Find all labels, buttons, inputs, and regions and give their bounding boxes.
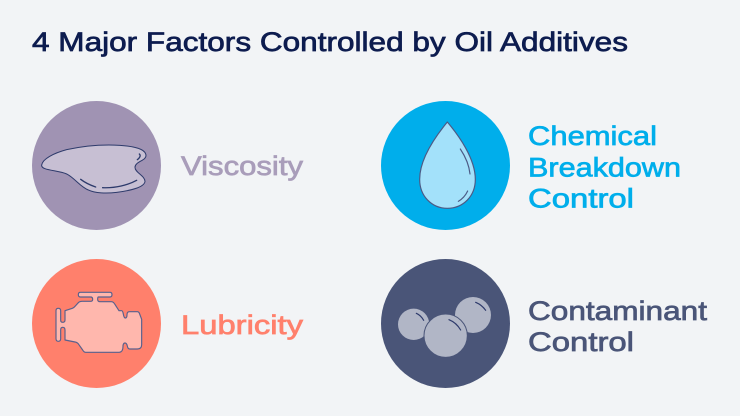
icon: water drop [420,122,475,208]
label: viscosity: Viscosity [181,151,304,181]
label: chemical breakdown control: Control [528,184,634,214]
panel: chemical breakdown control [381,101,681,230]
label: contaminant control: Control [528,327,634,357]
icon: oil puddle [42,145,146,193]
label: chemical breakdown control: Breakdown [528,152,681,182]
contaminant circle [381,259,510,388]
panel: lubricity [32,259,304,388]
title: 4 Major Factors Controlled by Oil Additives [32,27,628,57]
viscosity circle [32,101,161,230]
panel: viscosity [32,101,304,230]
chemical breakdown circle [381,101,510,230]
icon: particles [398,297,491,357]
label: chemical breakdown control: Chemical [528,121,657,151]
lubricity circle [32,259,161,388]
label: chemical breakdown control [528,121,681,214]
label: lubricity: Lubricity [181,310,304,340]
label: contaminant control: Contaminant [528,296,708,326]
label: contaminant control [528,296,708,357]
panel: contaminant control [381,259,708,388]
icon: engine [56,292,142,352]
